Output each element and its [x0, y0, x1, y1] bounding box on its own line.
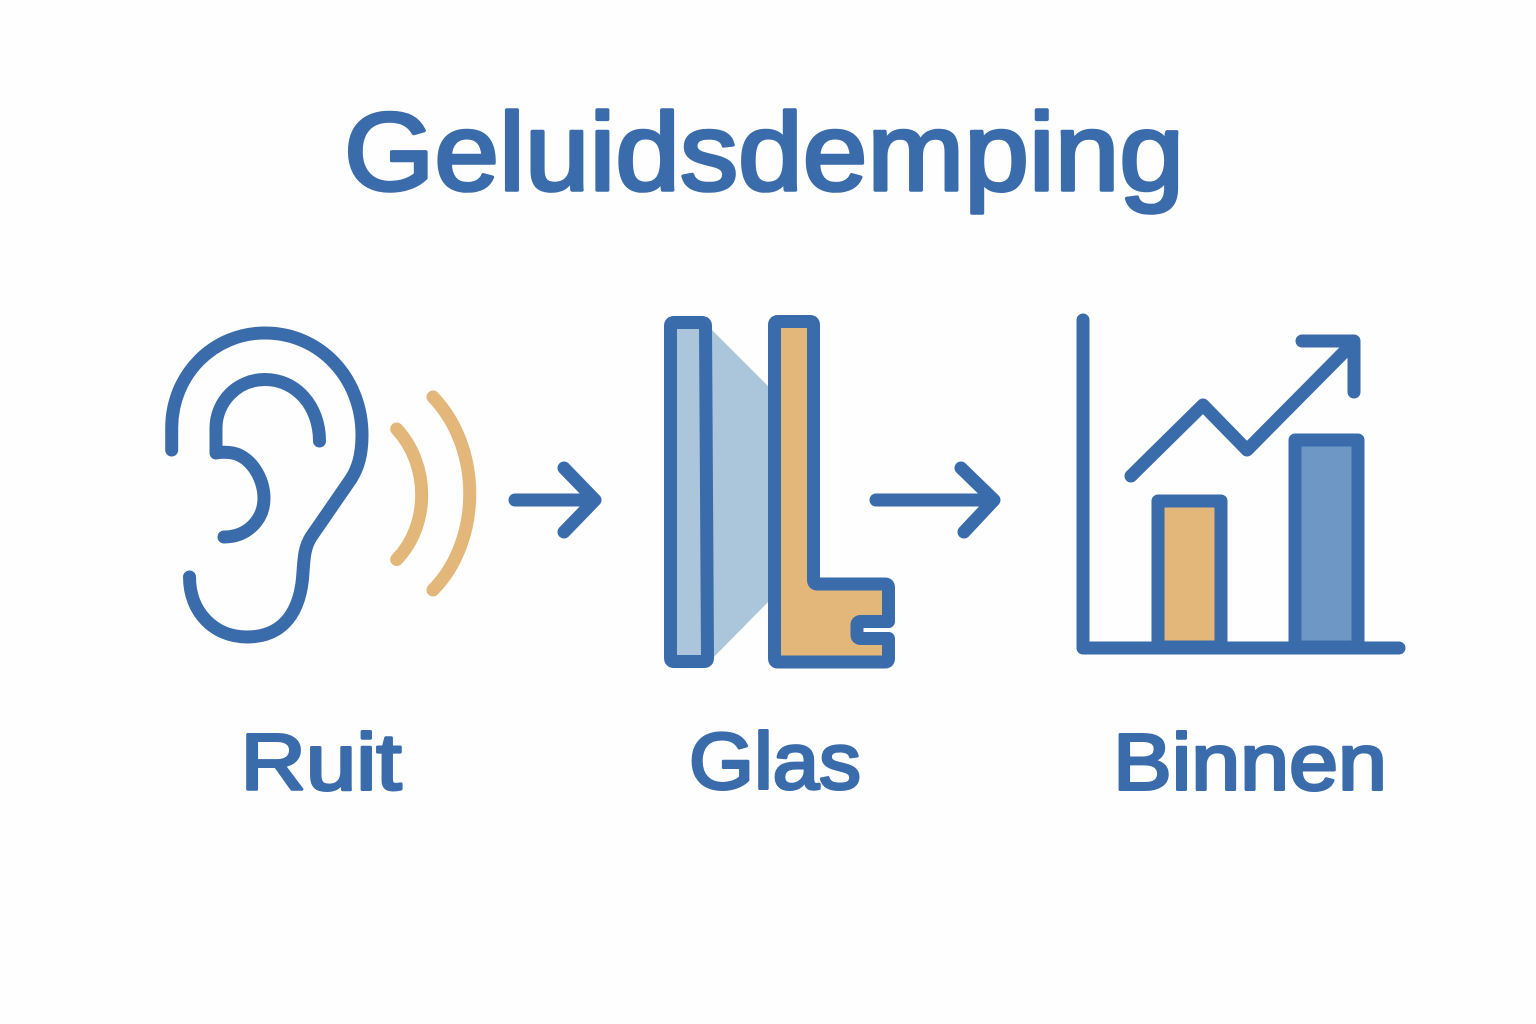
orange bar	[1158, 501, 1221, 647]
window frame	[774, 322, 888, 662]
light beam through glass	[708, 326, 768, 663]
arrow: ear to glass	[515, 468, 595, 532]
icon: glass pane and frame	[670, 322, 888, 663]
axes	[1083, 320, 1399, 648]
arrow: glass to chart	[876, 468, 994, 532]
title: Geluidsdemping	[344, 91, 1184, 214]
trend arrow head	[1302, 341, 1354, 392]
blue bar	[1295, 440, 1358, 647]
ear outline	[172, 333, 362, 637]
trend line	[1131, 343, 1353, 476]
label: Ruit: Ruit	[240, 718, 402, 806]
icon: ear with sound waves	[172, 333, 470, 637]
label: Binnen: Binnen	[1113, 718, 1387, 806]
label: Glas: Glas	[689, 716, 861, 806]
sound wave large	[433, 397, 470, 590]
icon: bar chart with rising arrow	[1083, 320, 1399, 648]
inner ear	[216, 380, 320, 537]
glass pane	[670, 322, 708, 662]
sound wave small	[397, 429, 422, 560]
